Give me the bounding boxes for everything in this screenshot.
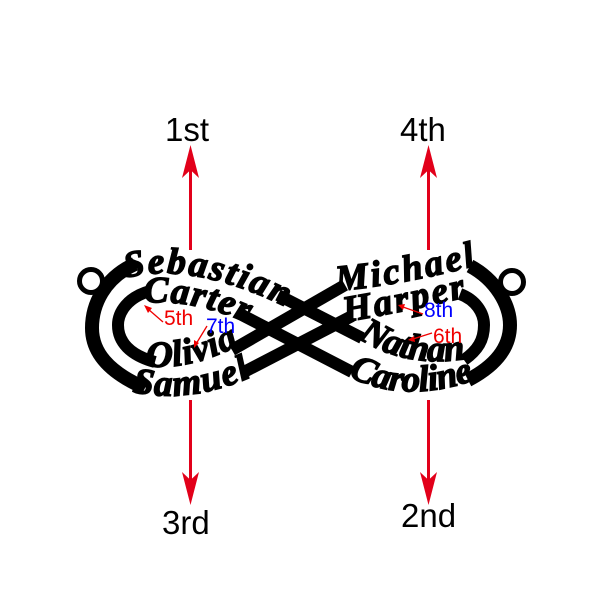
label: 3rd: 3rd xyxy=(162,504,210,541)
crossing bands xyxy=(232,285,362,372)
left ring xyxy=(80,270,102,292)
callout: 7th xyxy=(194,315,235,348)
name: Samuel: Samuel xyxy=(132,352,250,397)
name: Olivia: Olivia xyxy=(147,329,235,368)
arrow: down to 3rd xyxy=(182,400,199,505)
infinity necklace xyxy=(77,240,526,397)
callout: 6th xyxy=(408,325,462,348)
callout: 8th xyxy=(398,299,453,322)
name: Nathan: Nathan xyxy=(360,318,464,362)
callout: 5th: 5th xyxy=(164,307,193,330)
name: Sebastian: Sebastian xyxy=(125,247,290,306)
name: Carter: Carter xyxy=(146,277,254,320)
callout: 6th: 6th xyxy=(433,325,462,348)
name: Caroline: Caroline xyxy=(351,358,470,392)
right ring xyxy=(500,270,524,294)
name: Harper: Harper xyxy=(344,280,464,322)
right outer and inner loops xyxy=(460,266,510,380)
callout: 5th xyxy=(144,305,193,330)
arrow: up to 1st xyxy=(182,145,199,250)
left outer and inner loops xyxy=(92,264,155,388)
label: 2nd: 2nd xyxy=(401,497,456,534)
arrow: up to 4th xyxy=(420,145,437,250)
callout: 8th: 8th xyxy=(424,299,453,322)
label: 4th: 4th xyxy=(400,111,446,148)
arrow: down to 2nd xyxy=(420,400,437,505)
label: 1st: 1st xyxy=(165,111,209,148)
callout: 7th: 7th xyxy=(206,315,235,338)
name: Michael: Michael xyxy=(336,240,472,291)
